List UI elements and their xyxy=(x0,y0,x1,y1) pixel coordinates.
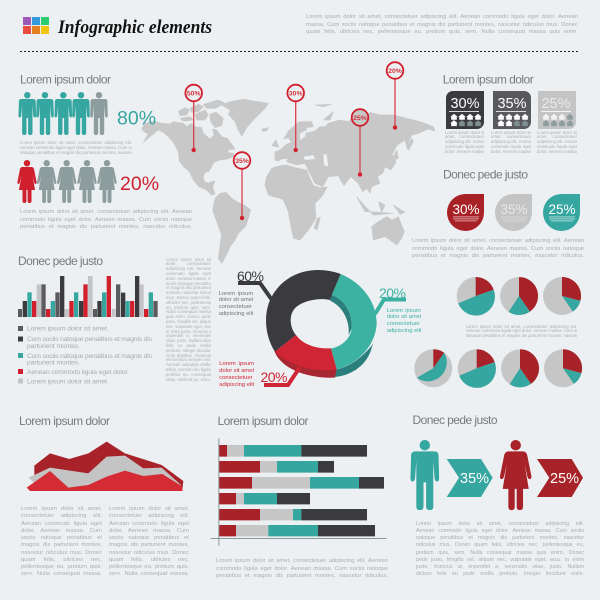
gender text xyxy=(416,521,584,580)
panel: area chart: consectetuer adipiscing elit. xyxy=(109,513,189,519)
marker 35%: 35% xyxy=(235,158,249,165)
map markers xyxy=(185,62,403,220)
marker 30% xyxy=(287,85,304,152)
panel: area chart: quam felis, ultricies nec, xyxy=(109,557,189,563)
bars text: Lorem ipsum dolor sit amet, consectetuer adipiscing elit. Aenean xyxy=(216,558,388,564)
map: South America xyxy=(213,192,251,263)
icon: man xyxy=(410,440,439,510)
dark segment xyxy=(266,270,341,352)
map: islands xyxy=(272,104,413,215)
world map xyxy=(142,99,435,263)
arrow 35%: 35% xyxy=(460,471,489,487)
panel: area chart: magnis dis parturient montes, xyxy=(109,542,189,548)
tile captions: commodo ligula eget xyxy=(491,144,531,149)
pies caption: natoque penatibus et magnis dis parturient montes, nascetur xyxy=(466,333,577,338)
heading: Lorem ipsum dolor xyxy=(20,72,111,86)
red segment xyxy=(275,335,337,370)
narrow text column xyxy=(166,258,211,384)
bars text: commodo ligula eget dolor. Aenean massa. Cum sociis natoque xyxy=(216,566,388,572)
stacked bar chart xyxy=(211,438,387,546)
callout 20% red: consectetuer xyxy=(219,374,252,380)
callout 20% red xyxy=(219,360,300,388)
callout 20% teal xyxy=(375,285,421,336)
text under women: Lorem ipsum dolor sit amet, consectetuer adipiscing elit. Aenean xyxy=(20,209,192,215)
men icons xyxy=(18,92,108,135)
panel: area chart: dolor. Aenean massa. Cum xyxy=(109,528,189,534)
narrow text column: et magnis dis parturient xyxy=(166,285,211,290)
area text columns: sociis natoque penatibus et xyxy=(21,535,102,541)
map: Iceland xyxy=(262,128,268,131)
heading: Donec pede justo xyxy=(443,168,528,182)
callout 20% red: 20% xyxy=(260,369,288,385)
gender text: natoque penatibus et magnis dis parturient montes, nascetur xyxy=(416,535,584,541)
marker 30%: 30% xyxy=(289,90,303,98)
bars text: penatibus et magnis dis parturient montes, nascetur ridiculus. xyxy=(216,573,388,579)
pie row 1 xyxy=(457,277,581,316)
panel: gender arrows xyxy=(410,413,584,580)
narrow text column: porttitor eu, consequat xyxy=(166,372,211,377)
narrow text column: amet, consectetuer xyxy=(166,261,211,266)
red side xyxy=(274,347,337,378)
drop 25% xyxy=(543,194,580,231)
tile captions: commodo ligula eget xyxy=(537,144,577,149)
panel: column chart xyxy=(18,254,158,385)
narrow text column: mus. Donec quam felis, xyxy=(166,295,211,300)
gender text: pretium quis, sem. Nulla consequat massa quis enim. Donec xyxy=(416,550,584,556)
icon: woman xyxy=(500,440,531,510)
panel: area chart: nascetur ridiculus mus. Donec xyxy=(109,550,189,556)
heading: Donec pede justo xyxy=(412,413,498,427)
area text columns: dolor. Aenean massa. Cum xyxy=(21,528,102,534)
donut xyxy=(266,270,377,378)
callout 20% teal: consectetuer xyxy=(387,321,420,327)
callout 60% xyxy=(219,268,272,318)
legend: Lorem ipsum dolor sit amet xyxy=(27,326,107,332)
callout 20% teal: 20% xyxy=(379,285,406,301)
map: Madagascar xyxy=(314,217,320,230)
text under women: penatibus et magnis dis parturient montes, nascetur ridiculus. xyxy=(20,224,192,230)
map: Africa xyxy=(265,165,327,240)
area text columns: magnis dis parturient montes, xyxy=(21,542,102,548)
narrow text column: Nulla consequat massa xyxy=(166,309,211,314)
legend: Lorem ipsum dolor sit amet xyxy=(27,378,107,385)
legend xyxy=(18,326,153,385)
arrow 35% xyxy=(447,459,493,497)
callout 20% teal: Lorem ipsum xyxy=(387,308,421,314)
panel: area chart: Lorem ipsum dolor sit amet, xyxy=(109,506,189,512)
panel: people stats xyxy=(17,72,192,232)
heading: Lorem ipsum dolor xyxy=(19,414,110,428)
tile 30%: 30% xyxy=(450,96,480,112)
narrow text column: felis eu pede mollis xyxy=(166,343,211,348)
area text columns: nascetur ridiculus mus. Donec xyxy=(21,550,102,556)
area text columns: quam felis, ultricies nec, xyxy=(21,557,102,563)
text under men: natoque penatibus et magnis dis parturient montes, nascetur xyxy=(20,150,132,154)
panel: house tiles xyxy=(443,72,577,157)
marker 35% xyxy=(234,152,250,220)
title: Infographic elements xyxy=(57,17,212,38)
panel: pie charts xyxy=(414,277,582,388)
narrow text column: Cras dapibus. Vivamus xyxy=(166,353,211,358)
teal side xyxy=(335,343,373,377)
heading: Lorem ipsum dolor xyxy=(218,414,308,428)
narrow text column: justo, fringilla vel, aliquet xyxy=(166,319,211,324)
area text columns: consectetuer adipiscing elit. xyxy=(21,513,102,519)
women icons xyxy=(17,160,117,203)
callout 20% red: Lorem ipsum xyxy=(219,360,254,366)
drop 35% xyxy=(495,194,532,231)
arrow 25% xyxy=(537,459,583,497)
map: Eurasia xyxy=(275,112,435,193)
20 percent: 20% xyxy=(120,173,159,195)
drops text: Lorem ipsum dolor sit amet, consectetuer adipiscing elit. Aenean xyxy=(412,238,584,244)
text under women xyxy=(20,209,192,232)
heading: Lorem ipsum dolor xyxy=(443,72,534,86)
drops text xyxy=(412,238,584,261)
gender text: ridiculus mus. Donec quam felis, ultricies nec, pellentesque eu, xyxy=(416,542,584,548)
marker 25%: 25% xyxy=(353,115,367,122)
pies caption xyxy=(466,325,577,340)
text under men: Lorem ipsum dolor sit amet, consectetuer adipiscing elit. xyxy=(20,140,132,144)
marker 50% xyxy=(185,85,202,152)
narrow text column: imperdiet a, venenatis xyxy=(166,333,211,338)
legend: parturient montes. xyxy=(27,343,80,350)
header xyxy=(23,14,578,38)
tile captions: amet, consectetuer xyxy=(491,134,531,139)
narrow text column: elementum semper nisi. xyxy=(166,357,211,362)
area text columns: sem. Nulla consequat massa. xyxy=(21,571,102,577)
area text columns xyxy=(21,506,102,580)
area text columns: Aenean commodo ligula eget xyxy=(21,520,102,526)
panel: stacked bars xyxy=(211,414,388,581)
text under women: commodo ligula eget dolor. Aenean massa. Cum sociis natoque xyxy=(20,217,192,223)
map: Arctic islands xyxy=(178,100,225,128)
pie row 2 xyxy=(414,349,582,388)
narrow text column: adipiscing elit. Aenean xyxy=(166,266,211,271)
marker 25% xyxy=(352,109,368,177)
legend: Cum sociis natoque penatibus et magnis dis xyxy=(27,353,153,360)
callout 60%: Lorem ipsum xyxy=(219,290,253,296)
callout 60%: consectetuer xyxy=(219,304,252,310)
gender text: Aenean commodo ligula eget dolor. Aenean massa. Cum sociis xyxy=(416,528,584,534)
gender text: dictum felis eu pede mollis pretium. Integer tincidunt enim. xyxy=(416,571,584,577)
bars text xyxy=(216,558,388,581)
narrow text column: tellus. Aenean leo ligula, xyxy=(166,367,211,372)
narrow text column: quis enim. Donec pede xyxy=(166,314,211,319)
intro text: quam felis, ultricies nec, pellentesque eu, pretium quis, sem. Nulla consequat massa quis enim. xyxy=(306,29,578,35)
area chart xyxy=(27,442,183,491)
arrow 25%: 25% xyxy=(550,471,579,487)
intro text xyxy=(306,14,578,37)
gender text: Lorem ipsum dolor sit amet, consectetuer adipiscing elit. xyxy=(416,521,584,527)
legend: parturient montes. xyxy=(27,360,80,366)
drops text: commodo ligula eget dolor. Aenean massa. Cum sociis natoque xyxy=(412,246,584,252)
tile captions: dolor. Aenean massa. xyxy=(537,149,577,154)
drop 35%: 35% xyxy=(500,202,528,217)
narrow text column: eu, pretium quis, sem. xyxy=(166,305,211,310)
area text columns: Lorem ipsum dolor sit amet, xyxy=(21,506,102,512)
map: Greenland xyxy=(222,99,268,136)
80 percent: 80% xyxy=(117,108,156,130)
panel: area chart: sem. Nulla consequat massa. xyxy=(109,571,189,577)
callout 60%: 60% xyxy=(237,268,264,284)
tile 35%: 35% xyxy=(497,96,527,112)
inner shade xyxy=(330,295,352,335)
panel: area chart: pellentesque eu, pretium quis, xyxy=(109,564,189,570)
tile captions: amet, consectetuer xyxy=(537,134,577,139)
legend: Cum sociis natoque penatibus et magnis dis xyxy=(27,336,153,343)
marker 50%: 50% xyxy=(187,90,201,98)
map: North America xyxy=(142,121,235,195)
legend: Aenean commodo ligula eget dolor. xyxy=(27,369,129,376)
panel: area chart: sociis natoque penatibus et xyxy=(109,535,189,541)
gender text: justo, rhoncus ut, imperdiet a, venenatis vitae, justo. Nullam xyxy=(416,564,584,570)
intro text: Lorem ipsum dolor sit amet, consectetuer adipiscing elit. Aenean commodo ligula eget dolor. Aenean xyxy=(306,14,578,20)
tile captions: dolor. Aenean massa. xyxy=(491,149,531,154)
marker 20%: 20% xyxy=(388,68,402,75)
tile captions xyxy=(445,131,577,157)
drop 30%: 30% xyxy=(452,202,480,217)
intro text: massa. Cum sociis natoque penatibus et magnis dis parturient montes, nascetur ridiculus mus. Donec xyxy=(306,22,578,28)
panel: area chart: Aenean commodo ligula eget xyxy=(109,520,189,526)
panel: area chart xyxy=(19,414,189,580)
teal segment xyxy=(331,274,377,369)
tile captions: commodo ligula eget xyxy=(445,144,484,149)
tile captions: amet, consectetuer xyxy=(445,134,484,139)
text under men xyxy=(20,140,132,156)
map: Australia xyxy=(372,217,404,245)
drop 30% xyxy=(447,194,484,231)
gender text: pede justo, fringilla vel, aliquet nec, vulputate eget, arcu. In enim xyxy=(416,557,584,563)
drop 25%: 25% xyxy=(548,202,576,217)
heading: Donec pede justo xyxy=(18,254,103,268)
icon: colour grid xyxy=(23,17,49,34)
narrow text column: vitae, eleifend ac, enim. xyxy=(166,377,211,382)
tile 25%: 25% xyxy=(541,96,571,112)
panel: donut chart xyxy=(219,268,421,388)
marker 20% xyxy=(387,62,403,130)
map: inland seas xyxy=(300,130,328,167)
area text columns: pellentesque eu, pretium quis, xyxy=(21,564,102,570)
panel: drops xyxy=(412,168,584,261)
column chart xyxy=(18,276,158,317)
narrow text column: commodo ligula eget xyxy=(166,271,211,276)
drops text: penatibus et magnis dis parturient montes, nascetur ridiculus. xyxy=(412,253,584,259)
